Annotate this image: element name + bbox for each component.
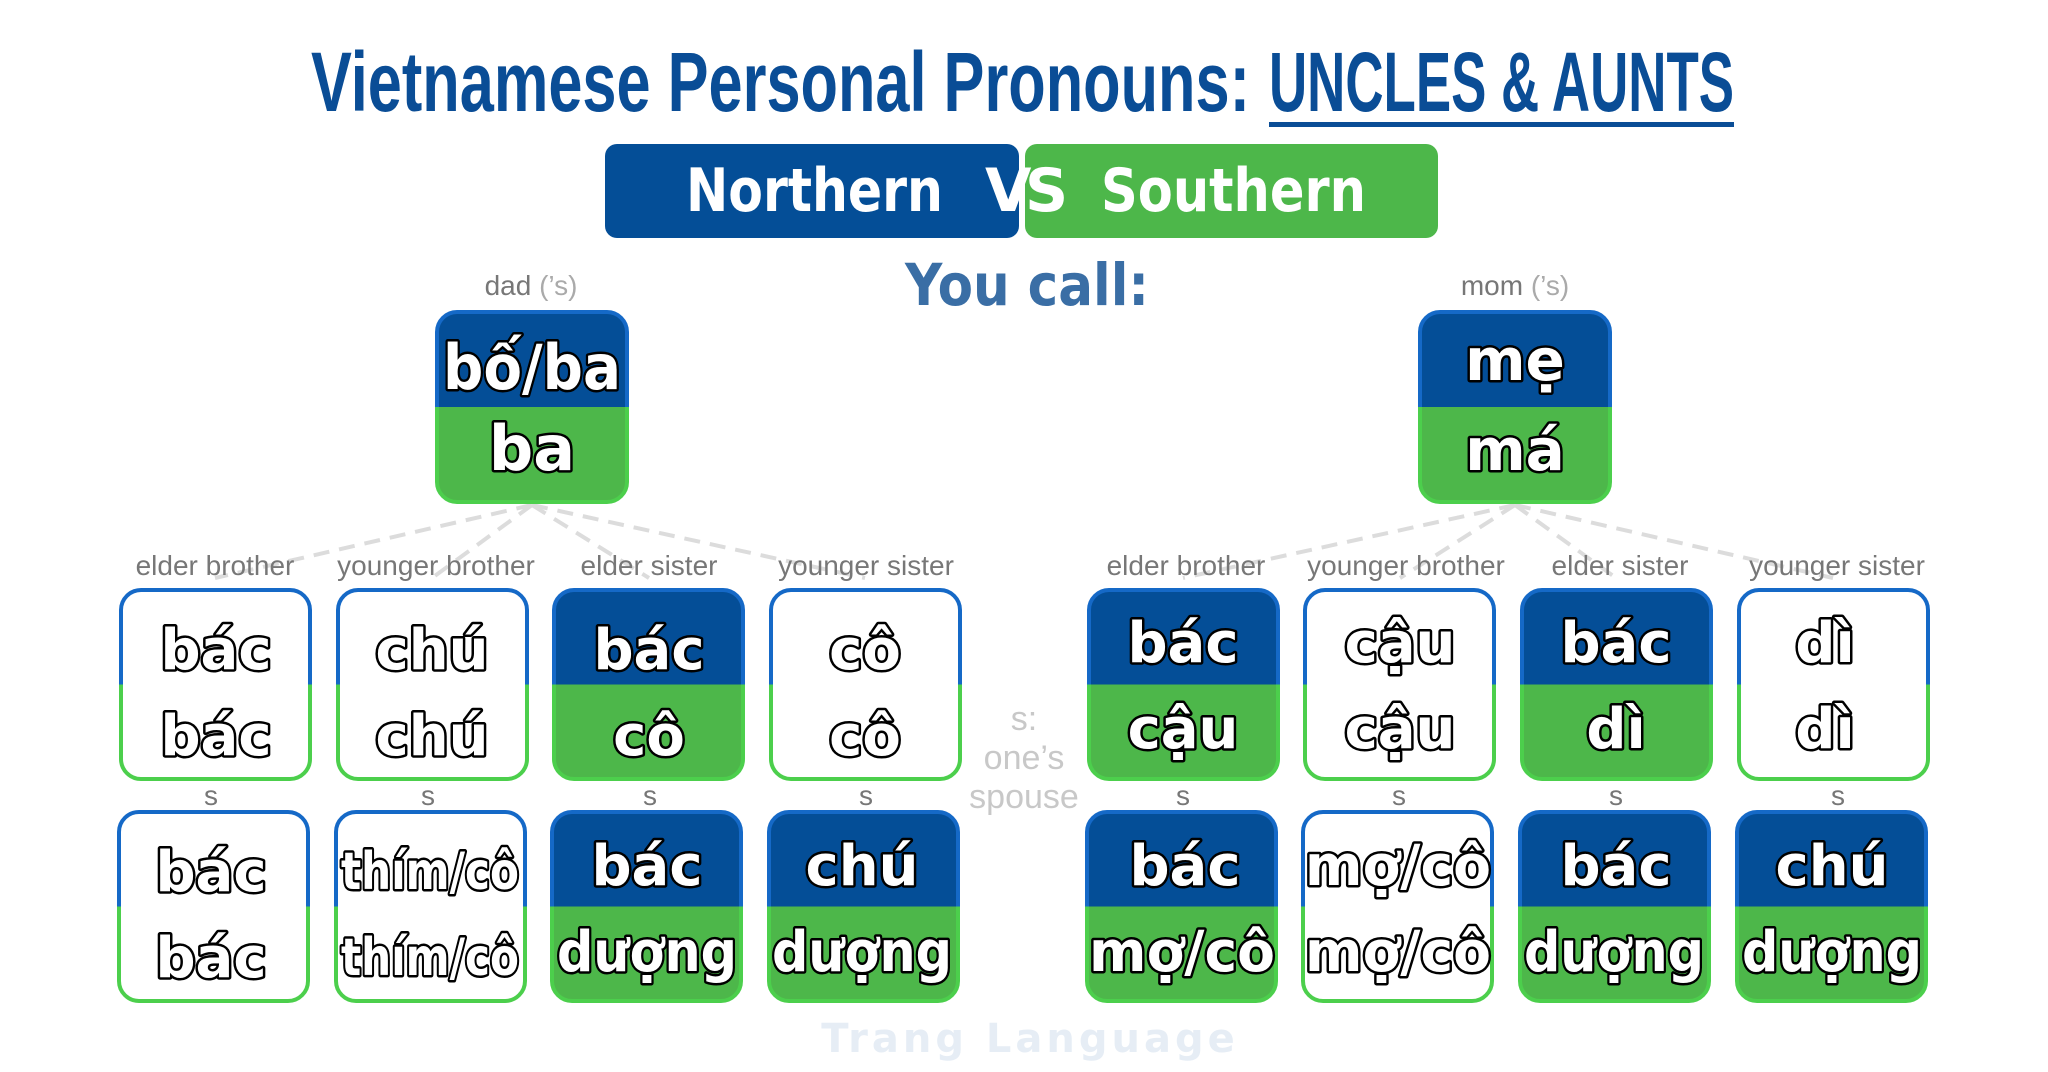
row 1 boxes: mom's siblings: dì: [1795, 697, 1855, 762]
parent: dad: ba: [489, 412, 575, 485]
parent: dad: dad (’s): [485, 270, 577, 301]
legend: s = one's spouse: s:: [1011, 700, 1037, 738]
row 2 boxes: dad's siblings' spouses: dượng: [772, 920, 952, 985]
spouse markers: [204, 780, 1845, 811]
sibling labels: [136, 550, 1925, 581]
row 1 boxes: mom's siblings: [1089, 590, 1928, 779]
sibling labels: younger sister: [1749, 550, 1925, 581]
connector lines: [215, 505, 1833, 578]
row 1 boxes: mom's siblings: cậu: [1345, 611, 1455, 676]
row 1 boxes: dad's siblings: [121, 590, 960, 779]
watermark: Trang Language: [821, 1016, 1239, 1062]
row 2 boxes: dad's siblings' spouses: dượng: [557, 920, 737, 985]
sibling labels: younger brother: [1307, 550, 1505, 581]
northern vs southern banner: [605, 144, 1438, 238]
spouse markers: s: [859, 780, 873, 811]
legend: s = one's spouse: [969, 700, 1079, 816]
row 2 boxes: mom's siblings' spouses: bác: [1129, 834, 1241, 899]
row 2 boxes: mom's siblings' spouses: dượng: [1524, 920, 1704, 985]
row 2 boxes: dad's siblings' spouses: thím/cô: [341, 842, 519, 902]
sibling labels: elder sister: [581, 550, 717, 581]
parent: dad: bố/ba: [443, 331, 621, 404]
legend: s = one's spouse: one’s: [984, 739, 1064, 777]
parent: mom: mẹ: [1465, 326, 1565, 394]
row 1 boxes: dad's siblings: chú: [376, 618, 488, 683]
row 2 boxes: dad's siblings' spouses: bác: [155, 840, 267, 905]
sibling labels: elder sister: [1552, 550, 1688, 581]
row 2 boxes: dad's siblings' spouses: [119, 812, 958, 1001]
northern vs southern banner: Northern: [686, 156, 943, 226]
parent: mom: má: [1465, 416, 1565, 484]
row 2 boxes: mom's siblings' spouses: mợ/cô: [1305, 920, 1491, 985]
row 2 boxes: dad's siblings' spouses: bác: [155, 926, 267, 991]
row 2 boxes: mom's siblings' spouses: chú: [1776, 834, 1888, 899]
spouse markers: s: [421, 780, 435, 811]
title: UNCLES & AUNTS: [1269, 35, 1734, 129]
row 2 boxes: mom's siblings' spouses: mợ/cô: [1089, 920, 1275, 985]
row 1 boxes: mom's siblings: cậu: [1345, 697, 1455, 762]
row 1 boxes: mom's siblings: cậu: [1128, 697, 1238, 762]
row 1 boxes: mom's siblings: bác: [1560, 611, 1672, 676]
row 1 boxes: dad's siblings: bác: [160, 704, 272, 769]
row 1 boxes: mom's siblings: dì: [1586, 697, 1646, 762]
northern vs southern banner: Southern: [1101, 156, 1366, 226]
row 1 boxes: dad's siblings: bác: [593, 618, 705, 683]
sibling labels: elder brother: [136, 550, 294, 581]
row 2 boxes: mom's siblings' spouses: [1087, 812, 1926, 1001]
row 1 boxes: mom's siblings: dì: [1795, 611, 1855, 676]
spouse markers: s: [1176, 780, 1190, 811]
spouse markers: s: [643, 780, 657, 811]
parent: mom: mom (’s): [1461, 270, 1569, 301]
row 2 boxes: dad's siblings' spouses: thím/cô: [341, 928, 519, 988]
row 2 boxes: mom's siblings' spouses: mợ/cô: [1305, 834, 1491, 899]
row 1 boxes: mom's siblings: bác: [1127, 611, 1239, 676]
row 2 boxes: mom's siblings' spouses: dượng: [1742, 920, 1922, 985]
sibling labels: elder brother: [1107, 550, 1265, 581]
you call heading: You call:: [904, 251, 1149, 319]
row 1 boxes: dad's siblings: cô: [613, 704, 685, 769]
row 1 boxes: dad's siblings: cô: [829, 618, 901, 683]
row 2 boxes: dad's siblings' spouses: bác: [591, 834, 703, 899]
sibling labels: younger brother: [337, 550, 535, 581]
title: Vietnamese Personal Pronouns:: [311, 35, 1250, 129]
northern vs southern banner: V: [985, 156, 1032, 226]
legend: s = one's spouse: spouse: [969, 778, 1079, 816]
row 2 boxes: dad's siblings' spouses: chú: [806, 834, 918, 899]
sibling labels: younger sister: [778, 550, 954, 581]
row 2 boxes: mom's siblings' spouses: bác: [1560, 834, 1672, 899]
row 1 boxes: dad's siblings: bác: [160, 618, 272, 683]
row 1 boxes: dad's siblings: chú: [376, 704, 488, 769]
parent: mom: [1420, 270, 1610, 502]
spouse markers: s: [1831, 780, 1845, 811]
spouse markers: s: [1609, 780, 1623, 811]
parent: dad: [437, 270, 627, 502]
row 1 boxes: dad's siblings: cô: [829, 704, 901, 769]
northern vs southern banner: S: [1025, 156, 1068, 226]
spouse markers: s: [204, 780, 218, 811]
spouse markers: s: [1392, 780, 1406, 811]
